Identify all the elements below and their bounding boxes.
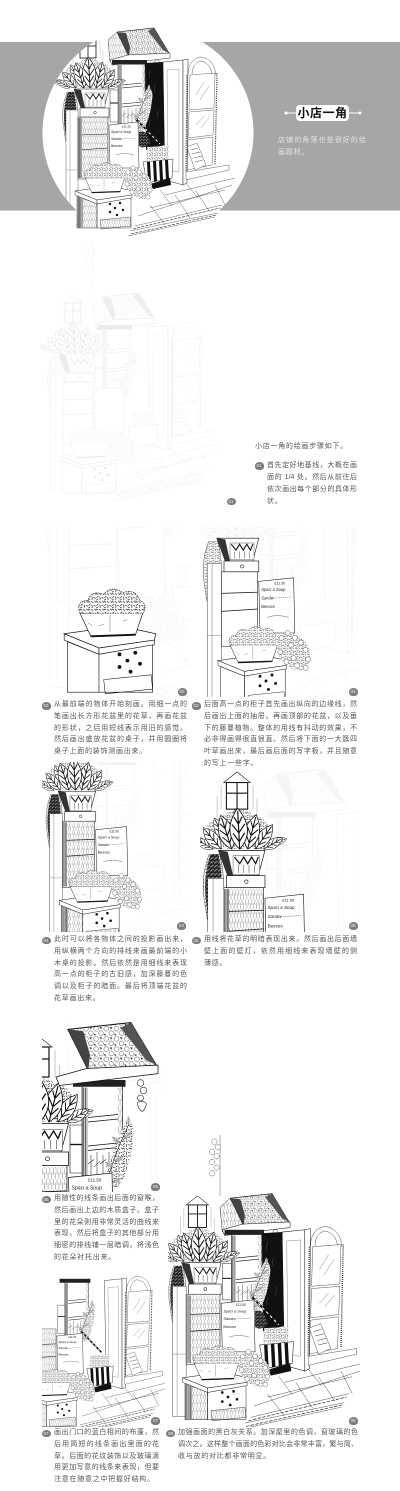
step 4 badge: 04: [43, 938, 48, 942]
step 2 image badge: [178, 688, 186, 696]
step 2 text: 笔画出长方形花盆里的花草，再画花盆: [54, 713, 187, 720]
step 1 badge: [254, 462, 264, 470]
step 2 image badge: 02: [179, 689, 184, 694]
step 4 text: 木桌的投影。然后依然是用细线来表现: [54, 960, 187, 967]
step 6 badge: 06: [43, 1196, 48, 1202]
step 1 text: 首先定好地基线，大概在画: [267, 462, 357, 468]
step 3 badge: [192, 702, 200, 710]
step 3 illustration: cabinet, sign and clover: [200, 527, 358, 697]
step 7 text: 草。后面的花纹装饰以及玻璃滴: [54, 1453, 159, 1460]
step 5 text: 壁上面的壁灯，依然用细线来表现墙壁的侧: [204, 948, 357, 955]
step 2 illustration: flower pot and table: [45, 527, 190, 697]
step 7 image badge: [151, 1417, 160, 1424]
step 3 image badge: 03: [350, 689, 356, 694]
step 3 badge: 03: [193, 703, 198, 708]
step 7 text: [54, 1428, 159, 1483]
subtitle text: 画题材。: [278, 149, 309, 156]
step 1 text: 状。: [267, 498, 282, 505]
step 6 text: 里的花朵则用非常灵活的曲线来: [54, 1219, 159, 1226]
step 1 sketch illustration: [37, 240, 220, 501]
step 8 badge: 08: [168, 1430, 173, 1436]
step 7 illustration: door, awning and window: [42, 1276, 165, 1427]
step 4 text: 调以及柜子的暗面。最后将顶端花盆的: [54, 983, 187, 990]
step 6 text: 的花朵衬托出来。: [54, 1254, 116, 1261]
subtitle text: [278, 136, 366, 156]
step 8 text: [178, 1428, 358, 1460]
step 5 text: 用线将花草的明暗表现出来。然后画出后面墙: [204, 936, 357, 943]
step 3 text: 必非得画得很直很直。然后将下面的一大簇四: [204, 736, 357, 743]
step 7 badge: 07: [43, 1430, 48, 1436]
step 1 text: [267, 461, 357, 505]
intro line: 小店一角的绘画步骤如下。: [255, 443, 348, 450]
hero illustration: shop corner: [55, 28, 235, 236]
step 7 text: 用更加写意的线条来表现，但要: [54, 1464, 159, 1471]
step 7 text: 注意在随意之中把握好结构。: [54, 1476, 155, 1483]
step 8 text: 收与放的对比都非常明显。: [178, 1453, 271, 1460]
step 7 text: 画出门口的蓝白相间的布蓬，然: [54, 1429, 159, 1436]
step 4 illustration: shaded cabinet and table: [42, 762, 190, 932]
step 5 text: [204, 935, 357, 967]
step 4 badge: [42, 936, 50, 944]
hero white circle: [42, 27, 254, 238]
step 3 text: 下的藤蔓植物。整体的用线有抖动的效果，不: [204, 725, 357, 732]
step 6 image badge: [151, 1183, 160, 1190]
step 8 illustration: finished drawing: [156, 1134, 364, 1429]
step 7 image badge: 07: [153, 1418, 158, 1423]
step 6 badge: [42, 1196, 50, 1203]
step 6 text: 用随性的线条画出后面的窗喉，: [54, 1195, 159, 1202]
grey header band: [0, 42, 400, 210]
step 5 image badge: [348, 922, 358, 930]
step 1 badge in image: [226, 498, 236, 505]
step 2 badge: [42, 702, 50, 710]
step 4 text: 高一点的柜子的古旧感，加深藤蔓的色: [54, 971, 187, 978]
step 8 image badge: [348, 1417, 358, 1424]
step 3 text: 叶草画出来，最后画后面的写字板，并且随意: [204, 748, 357, 755]
step 4 text: 用纵横两个方向的排线来画最前端的小: [54, 948, 187, 955]
step 5 illustration: foliage and wall lantern: [200, 769, 358, 932]
step 4 text: 花草画出来。: [54, 995, 100, 1002]
step 1 badge: 01: [256, 463, 262, 468]
step 6 text: 然后画出上边的木质盒子。盒子: [54, 1207, 159, 1214]
step 3 text: 后画出上面的抽屉。再画顶部的花盆，以及垂: [204, 713, 357, 720]
step 6 text: 细密的排线铺一层暗调，将浅色: [54, 1242, 159, 1249]
step 2 text: 然后画出盛放花盆的桌子，并用圆圈将: [54, 736, 187, 743]
step 4 image badge: 04: [179, 923, 184, 928]
step 8 badge: [166, 1430, 175, 1437]
step 2 text: 从最前端的物体开始刻画。用细一点的: [54, 701, 187, 708]
step 6 image badge: 06: [153, 1184, 158, 1189]
step 7 text: 后用简短的线条画出里面的花: [54, 1441, 159, 1448]
step 6 text: [54, 1194, 159, 1261]
step 5 badge: [192, 936, 200, 944]
step 4 image badge: [177, 922, 186, 930]
step 2 badge: 02: [43, 703, 48, 708]
step 8 text: 加强画面的黑白灰关系。加深屋里的色调，窗玻璃的色: [178, 1429, 358, 1436]
step 7 badge: [42, 1430, 50, 1437]
step 2 text: [54, 700, 187, 755]
step 3 text: [204, 700, 357, 767]
step 3 text: 后面高一点的柜子首先画出纵向的边缘线，然: [204, 701, 357, 708]
step 1 text: 面的 1/4 处。然后从前往后: [267, 474, 357, 481]
step 5 badge: 05: [193, 938, 198, 942]
step 5 text: 薄感。: [204, 960, 227, 967]
step 4 text: [54, 935, 187, 1002]
title connector with dots: [284, 112, 362, 114]
step 2 text: 桌子上面的装饰测画出来。: [54, 748, 147, 755]
step 2 text: 的形状，之后用短线表示用旧的感觉。: [54, 725, 187, 732]
step 4 text: 此时可以将各物体之间的投影画出来，: [54, 936, 187, 943]
step 6 illustration: window and wooden flower box: [42, 1022, 164, 1192]
subtitle text: 店铺的角落也是很好的绘: [278, 136, 366, 144]
step 3 image badge: [348, 688, 358, 696]
step 5 image badge: 05: [350, 923, 356, 928]
step 8 text: 调次之。这样整个画面的色彩对比会非常丰富，繁与简、: [178, 1441, 358, 1448]
step 8 image badge: 08: [350, 1418, 356, 1423]
step 1 badge in image: 01: [228, 498, 234, 504]
step 1 text: 依次画出每个部分的具体形: [267, 486, 357, 493]
step 3 text: 的写上一些字。: [204, 760, 258, 767]
step 6 text: 表现，然后将盒子的其他部分用: [54, 1230, 159, 1237]
title pill: 小店一角: [297, 106, 348, 120]
